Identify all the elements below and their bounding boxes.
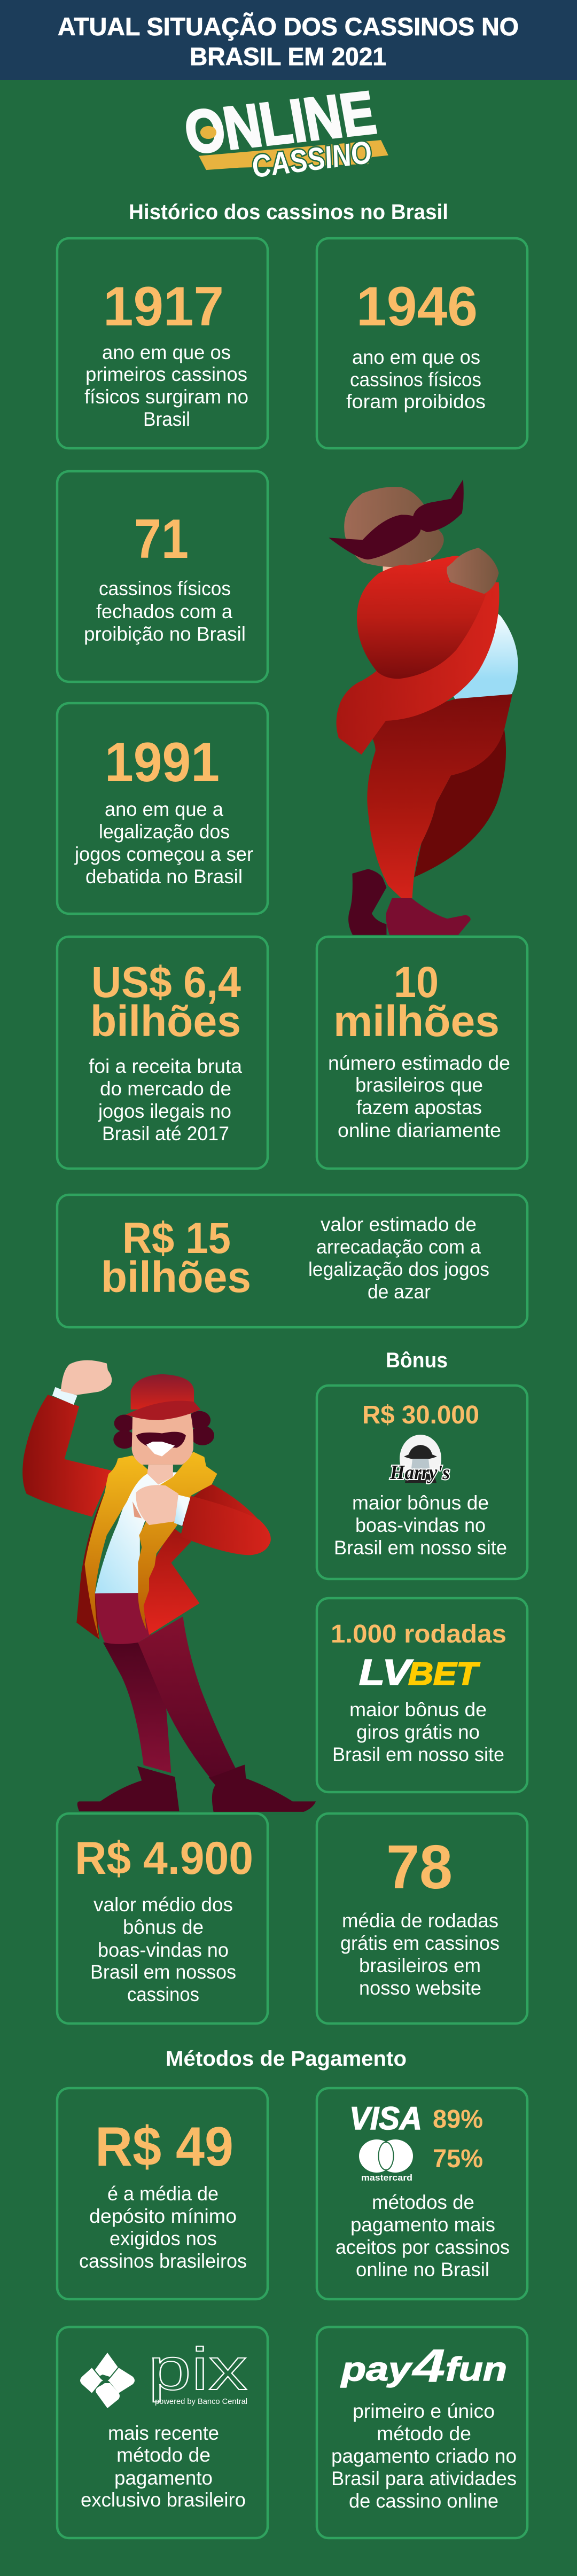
panel: R$ 49 [57,2088,268,2299]
number: 71: 71 [134,508,189,570]
heading: métodos de pagamento: Métodos de Pagamento [166,2047,407,2071]
description: foi a receita bruta [89,1055,242,1077]
description: maior bônus de [352,1492,489,1514]
description: boas-vindas no [98,1939,229,1961]
panel: Pix [57,2327,268,2538]
logo: Pix: pix [148,2336,247,2402]
logo: LV BET: LV [359,1652,414,1693]
panel: R$ 15 bilhões [57,1195,527,1327]
panel: Visa and Mastercard [317,2088,527,2299]
description: cassinos físicos [350,369,481,391]
amount: R$ 15 [122,1214,231,1263]
amount: 1.000 rodadas [331,1620,506,1648]
description: ano em que os [102,341,231,363]
description: maior bônus de [349,1699,487,1721]
logo: Online Cassino [180,79,388,184]
panel: R$ 4.900 [57,1814,268,2024]
description: método de [377,2423,471,2445]
description [332,1699,504,1765]
logo: Pay4Fun: fun [446,2351,507,2388]
panel: R$ 30.000 [317,1386,527,1579]
panel: 1946 [317,238,527,448]
illustration: man in red coat raising fist [22,1360,316,1812]
logo: Pay4Fun: pay [340,2351,413,2388]
description: de cassino online [349,2490,498,2512]
amount: R$ 30.000 [362,1401,479,1429]
description [340,1910,500,1999]
stat: Visa share: 89% [433,2105,483,2134]
logo: Harry's [389,1435,450,1484]
description: proibição no Brasil [84,623,246,645]
logo: Pay4Fun [340,2339,507,2392]
panel: 78 [317,1814,527,2024]
description [89,1055,242,1145]
description: ano em que os [352,346,480,368]
description: aceitos por cassinos [336,2236,510,2258]
amount: R$ 49 [95,2116,233,2178]
description: brasileiros em [359,1955,481,1976]
amount [333,958,500,1046]
amount [90,958,241,1046]
description: média de rodadas [342,1910,498,1932]
logo: Pix: powered by Banco Central [155,2397,247,2406]
description: grátis em cassinos [340,1932,500,1954]
amount: bilhões [101,1253,251,1302]
panel: US$ 6,4 bilhões [57,937,268,1169]
description: ano em que a [105,798,223,820]
description: fechados com a [96,601,232,622]
description [346,346,486,413]
logo: Mastercard [359,2139,413,2183]
description: arrecadação com a [316,1236,481,1258]
amount: milhões [333,997,500,1046]
description: online no Brasil [356,2259,489,2281]
description: jogos começou a ser [74,843,253,865]
description: é a média de [107,2183,219,2205]
amount [101,1214,251,1302]
panel: Pay4Fun [317,2327,527,2538]
panel: 1917 [57,238,268,448]
description: de azar [368,1281,431,1303]
description: valor estimado de [321,1213,477,1235]
description: Brasil em nosso site [334,1537,507,1559]
description: pagamento criado no [331,2445,517,2467]
logo: LV BET [359,1652,480,1693]
description: boas-vindas no [355,1514,486,1536]
description: nosso website [359,1977,481,1999]
panel: 10 milhões [317,937,527,1169]
panel: 1.000 rodadas [317,1598,527,1792]
logo: Harry's: Harry's [389,1461,450,1484]
description: pagamento [114,2467,213,2489]
number: 1991: 1991 [105,731,220,793]
description: fazem apostas [356,1096,482,1118]
logo: Online Cassino: ONLINE [180,79,380,167]
description [308,1213,489,1303]
description [336,2191,510,2281]
description: depósito mínimo [89,2205,237,2227]
description: online diariamente [338,1119,501,1141]
description: foram proibidos [346,391,486,413]
amount: 10 [394,958,439,1007]
description: métodos de [372,2191,474,2213]
description: Brasil [143,408,190,430]
header band with title [0,0,577,80]
logo: Pay4Fun: 4 [411,2339,446,2392]
description: cassinos físicos [99,578,231,600]
logo: Online Cassino: CASSINO [248,135,375,184]
description [334,1492,507,1559]
description [79,2183,247,2272]
stat: Mastercard share: 75% [433,2145,483,2173]
header band with title: BRASIL EM 2021 [190,42,386,71]
description [84,578,246,645]
description: Brasil para atividades [331,2468,517,2489]
logo: Mastercard: mastercard [361,2173,412,2183]
description [74,798,253,888]
description: Brasil até 2017 [102,1123,229,1145]
logo: LV BET: BET [408,1656,480,1692]
description [81,2422,246,2511]
description: exigidos nos [110,2228,217,2250]
description: valor médio dos [93,1894,233,1916]
description [331,2400,517,2512]
panel: 1991 [57,703,268,914]
description: número estimado de [328,1052,510,1074]
description: exclusivo brasileiro [81,2489,246,2511]
description: jogos ilegais no [98,1100,231,1122]
description: bônus de [123,1916,204,1938]
logo: Visa: VISA [349,2100,422,2136]
panel: 71 [57,471,268,682]
amount: US$ 6,4 [91,958,241,1007]
description: Brasil em nossos [90,1961,236,1983]
number: 1946: 1946 [356,276,478,338]
description: debatida no Brasil [85,866,243,888]
logo: Pix [80,2336,247,2408]
description: físicos surgiram no [84,386,248,408]
description: cassinos [127,1983,199,2005]
description: legalização dos [99,821,230,843]
amount: R$ 4.900 [75,1833,253,1884]
illustration: man with moustache seen from behind [329,479,518,935]
description: primeiro e único [353,2400,495,2422]
description: cassinos brasileiros [79,2250,247,2272]
description: método de [116,2444,210,2466]
number: 78: 78 [386,1832,453,1902]
description: mais recente [108,2422,219,2444]
description: Brasil em nosso site [332,1744,504,1765]
header band with title: ATUAL SITUAÇÃO DOS CASSINOS NO [58,12,519,41]
number: 1917: 1917 [103,276,224,338]
amount: bilhões [90,997,241,1046]
description [84,341,248,430]
description: do mercado de [100,1078,231,1100]
description: primeiros cassinos [85,363,247,385]
description [328,1052,510,1141]
description: brasileiros que [355,1074,483,1096]
heading: histórico: Histórico dos cassinos no Brasil [129,200,448,224]
heading: bônus: Bônus [386,1349,448,1372]
description: legalização dos jogos [308,1258,489,1280]
description: giros grátis no [356,1721,480,1743]
description [90,1894,236,2005]
description: pagamento mais [350,2214,495,2236]
